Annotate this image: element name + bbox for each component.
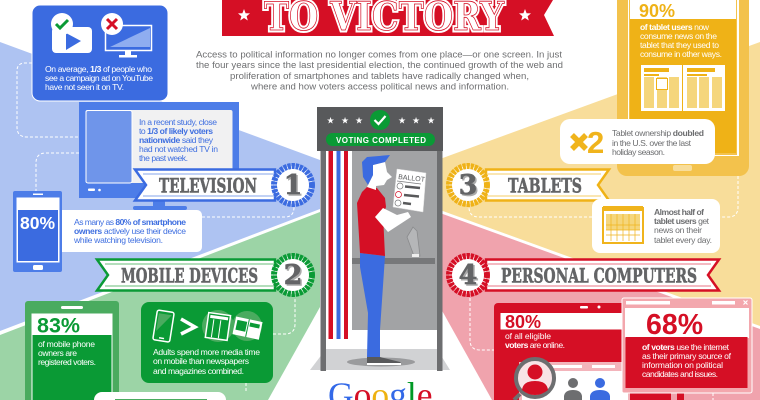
doubled text xyxy=(612,128,704,157)
number badge 1 xyxy=(274,166,312,204)
stars: ★ xyxy=(412,116,420,126)
panel: 83% phone xyxy=(25,301,119,400)
panel: 80% online xyxy=(494,303,684,400)
youtube text: On average, 1/3 of people who xyxy=(45,64,152,74)
tv study text: In a recent study, close xyxy=(139,117,217,127)
number badge 2: 2 xyxy=(285,262,304,292)
banner: tablets xyxy=(449,166,609,204)
number badge 2: 2 xyxy=(284,260,302,291)
booth header xyxy=(317,107,443,151)
tv study text xyxy=(139,117,218,163)
68% text: as their primary source of xyxy=(642,351,732,361)
intro text: proliferation of smartphones and tablets have radically changed when, xyxy=(230,71,529,82)
tv study text: to 1/3 of likely voters xyxy=(139,126,213,136)
intro text: the four years since the last presidential election, the continued growth of the web and xyxy=(196,60,563,71)
icon: phone xyxy=(153,310,174,342)
stars: ★ xyxy=(341,116,349,126)
stars xyxy=(326,116,435,126)
mobile vs print text: on mobile than newspapers xyxy=(153,356,249,366)
smartphone card xyxy=(62,210,202,252)
title star left xyxy=(238,9,250,20)
tablet text: consume in other ways. xyxy=(640,49,722,59)
stars: ★ xyxy=(355,116,363,126)
status pill xyxy=(326,133,435,146)
68% text: information on political xyxy=(642,360,723,370)
tablet text: tablet that they used to xyxy=(640,40,719,50)
icon: close xyxy=(744,300,748,304)
youtube text: see a campaign ad on YouTube xyxy=(45,73,153,83)
title banner xyxy=(222,0,554,40)
pen stand xyxy=(407,227,420,257)
title star right xyxy=(519,9,531,20)
intro text xyxy=(196,50,563,92)
icon: times two: 2 xyxy=(587,125,604,160)
booth back panel xyxy=(352,151,437,330)
ballot xyxy=(393,169,426,212)
stat: 68%: 68% xyxy=(646,309,703,341)
68% text: of voters use the internet xyxy=(642,342,730,352)
smartphone text: As many as 80% of smartphone xyxy=(74,217,186,227)
number badge 4 xyxy=(449,256,487,294)
stars: ★ xyxy=(326,116,335,126)
voting booth xyxy=(310,107,450,371)
tablet text xyxy=(640,22,722,59)
smartphone text: owners actively use their device xyxy=(74,226,186,236)
smartphone text xyxy=(73,217,186,245)
icon: newspaper xyxy=(641,65,725,111)
background wedge: mobile devices xyxy=(0,212,320,400)
panel: calendar daily news xyxy=(592,199,720,253)
number badge 1: 1 xyxy=(285,172,304,202)
tablet text: consume news on the xyxy=(640,31,717,41)
mobile vs print text: Adults spend more media time xyxy=(153,347,260,357)
mobile vs print text: and magazines combined. xyxy=(153,366,244,376)
calendar text: tablet users get xyxy=(654,216,710,226)
curtain stripes xyxy=(328,151,348,339)
number badge 2 xyxy=(274,256,312,294)
youtube text xyxy=(45,64,153,92)
booth posts xyxy=(320,151,442,371)
83% text xyxy=(38,339,96,367)
banner: mobile devices xyxy=(97,256,312,294)
icon: television xyxy=(106,26,152,58)
background wedge: television xyxy=(0,42,320,331)
icon: newspaper and magazine xyxy=(202,310,263,342)
stat: 90%: 90% xyxy=(639,1,675,21)
intro text: Access to political information no longer comes from one place—or one screen. In just xyxy=(196,50,562,60)
status text: VOTING COMPLETED xyxy=(336,136,426,145)
shelf xyxy=(352,258,435,264)
panel: tablet ownership doubled xyxy=(560,119,715,164)
doubled text: in the U.S. over the last xyxy=(612,138,692,148)
heading: TABLETS xyxy=(508,174,582,198)
heading: TELEVISION xyxy=(159,174,257,198)
intro text: where and how voters access political news and information. xyxy=(250,82,509,92)
icon: video player xyxy=(52,27,92,53)
doubled text: Tablet ownership doubled xyxy=(612,128,704,138)
panel: cut-off white card xyxy=(94,392,226,400)
icon: check badge xyxy=(51,13,73,35)
stars: ★ xyxy=(427,116,435,126)
panel: 90% tablet xyxy=(617,0,749,176)
number badge 3: 3 xyxy=(459,170,477,201)
calendar text: Almost half of xyxy=(654,207,704,217)
stat: 80%: 80% xyxy=(20,213,55,233)
panel: smartphone 80% xyxy=(13,191,202,272)
smartphone text: while watching television. xyxy=(73,235,163,245)
tv study text: the past week. xyxy=(139,153,188,163)
icon: calendar xyxy=(603,206,643,243)
68% text xyxy=(642,342,732,379)
panel: 68% primary source xyxy=(622,298,752,393)
panel: mobile vs print xyxy=(141,302,273,383)
voter figure xyxy=(347,155,426,366)
online text: voters are online. xyxy=(505,340,565,350)
booth floor xyxy=(310,349,450,370)
icon: times two xyxy=(572,125,604,160)
mobile vs print text xyxy=(153,347,260,376)
calendar text xyxy=(654,207,712,245)
stat: 83%: 83% xyxy=(37,314,80,338)
number badge 4: 4 xyxy=(460,262,479,292)
icon: close: × xyxy=(622,365,626,372)
stat: 80%: 80% xyxy=(505,312,541,332)
ballot: BALLOT xyxy=(398,174,426,184)
calendar text: news on their xyxy=(654,225,702,235)
background wedge: personal computers xyxy=(440,213,760,400)
panel: tv study xyxy=(79,102,239,210)
83% text: owners are xyxy=(38,348,77,358)
tv study text: had not watched TV in xyxy=(139,144,218,154)
background wedge: tablets xyxy=(440,42,760,326)
online text: of all eligible xyxy=(505,331,551,341)
83% text: of mobile phone xyxy=(38,339,95,349)
youtube text: have not seen it on TV. xyxy=(45,82,124,92)
number badge 4: 4 xyxy=(459,260,477,291)
panel: youtube vs tv xyxy=(32,5,168,101)
icon: greater than xyxy=(181,319,195,334)
icon: gray person xyxy=(564,378,582,400)
icon: cross badge xyxy=(101,13,123,35)
banner: television xyxy=(135,166,312,204)
panel: small window with people xyxy=(514,359,630,400)
tv study text: nationwide said they xyxy=(139,135,214,145)
number badge 1: 1 xyxy=(284,170,302,201)
icon: blue person xyxy=(590,378,610,400)
number badge 3: 3 xyxy=(460,172,479,202)
dashed connectors xyxy=(17,63,738,400)
stars: ★ xyxy=(398,116,406,126)
doubled text: holiday season. xyxy=(612,147,665,157)
calendar text: tablet every day. xyxy=(654,235,712,245)
heading: MOBILE DEVICES xyxy=(121,264,258,288)
68% text: candidates and issues. xyxy=(642,369,718,379)
check badge xyxy=(370,110,390,130)
icon: magnifier xyxy=(514,359,554,400)
online text xyxy=(505,331,565,350)
banner: personal computers xyxy=(449,256,719,294)
83% text: registered voters. xyxy=(38,357,96,367)
tablet text: of tablet users now xyxy=(640,22,710,32)
number badge 3 xyxy=(449,166,487,204)
